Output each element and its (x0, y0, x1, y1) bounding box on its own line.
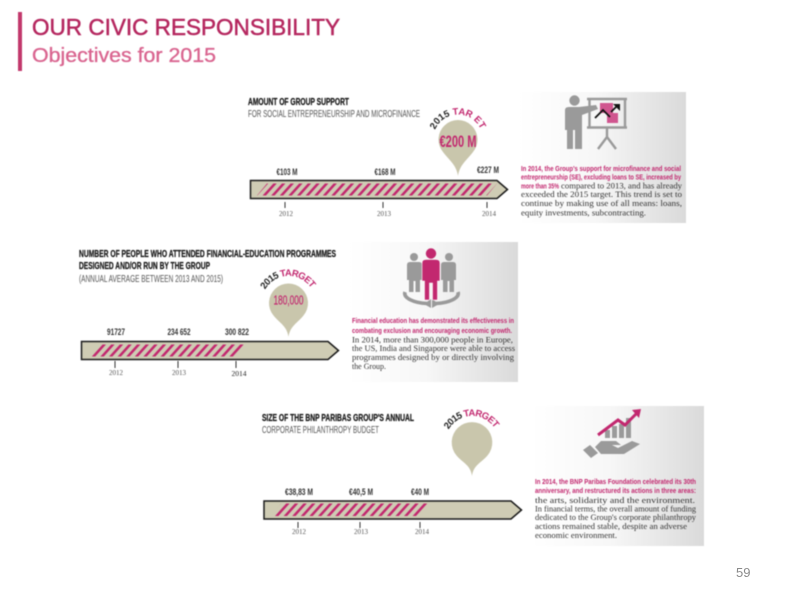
target pin (443, 408, 500, 476)
body text: dedicated to the Group's corporate philanthropy (535, 512, 697, 522)
target pin: 2015 TARGET (443, 408, 500, 430)
panel background (533, 406, 704, 546)
body text: In 2014, more than 300,000 people in Europe, (352, 334, 513, 344)
values: €40 M (411, 487, 429, 497)
year ticks (279, 202, 496, 218)
icon: hand with rising chart (583, 409, 641, 458)
values: €40,5 M (349, 487, 373, 497)
year ticks: 2013 (354, 528, 368, 536)
target pin (260, 268, 317, 336)
body text: more than 35% (521, 182, 559, 190)
year ticks: 2014 (415, 528, 430, 536)
year ticks: 2014 (232, 369, 247, 378)
timeline arrow (250, 180, 508, 198)
body text: the arts, solidarity and the environment. (535, 495, 695, 505)
heading: (ANNUAL AVERAGE BETWEEN 2013 AND 2015) (79, 273, 223, 285)
body text: In financial terms, the overall amount of funding (535, 504, 697, 514)
body text: equity investments, subcontracting. (521, 208, 646, 218)
body text: exceeded the 2015 target. This trend is set to (521, 189, 682, 199)
panel: group support (247, 92, 686, 224)
body text: the Group. (352, 361, 386, 371)
values (276, 165, 499, 177)
subtitle: Objectives for 2015 (32, 45, 216, 67)
heading: NUMBER OF PEOPLE WHO ATTENDED FINANCIAL-EDUCATION PROGRAMMES (79, 248, 336, 260)
header (18, 12, 340, 71)
target pin: 180,000 (274, 294, 304, 308)
values (285, 487, 429, 497)
page number: 59 (736, 565, 750, 580)
heading: DESIGNED AND/OR RUN BY THE GROUP (79, 260, 210, 272)
body text: In 2014, the BNP Paribas Foundation celebrated its 30th (535, 477, 696, 486)
body text: actions remained stable, despite an adverse (535, 521, 687, 531)
timeline arrow (264, 501, 522, 519)
year ticks: 2013 (172, 369, 186, 377)
body text (521, 164, 683, 218)
body text: entrepreneurship (SE), excluding loans to SE, increased by (521, 172, 682, 182)
body text: anniversary, and restructured its actions in three areas: (535, 486, 696, 495)
body text (352, 316, 516, 371)
year ticks (109, 361, 247, 378)
values: 234 652 (168, 327, 190, 337)
year ticks: 2014 (482, 210, 496, 218)
heading: CORPORATE PHILANTHROPY BUDGET (262, 424, 379, 436)
target pin: €200 M (440, 132, 476, 151)
values: 300 822 (225, 327, 249, 337)
body text: economic environment. (535, 530, 617, 540)
heading (79, 248, 336, 285)
year ticks (292, 522, 430, 536)
body text: In 2014, the Group's support for microfinance and social (521, 164, 681, 173)
heading (262, 412, 414, 436)
body text: combating exclusion and encouraging economic growth. (352, 326, 512, 335)
values: 91727 (107, 327, 125, 337)
body text: continue by making use of all means: loans, (521, 198, 682, 208)
target pin: 2015 TAR ET (429, 107, 487, 130)
values: €168 M (374, 167, 396, 177)
panel: philanthropy budget (262, 406, 704, 546)
timeline arrow (82, 342, 338, 360)
icon: group of people (405, 248, 458, 308)
heading: FOR SOCIAL ENTREPRENEURSHIP AND MICROFINANCE (248, 108, 420, 120)
values: €103 M (276, 167, 298, 177)
panel background (350, 242, 518, 382)
body text (535, 477, 697, 540)
year ticks: 2012 (292, 528, 306, 536)
panel background (520, 92, 686, 223)
target pin: 2015 TARGET (260, 268, 317, 290)
panel: financial education (78, 242, 518, 382)
body text: Financial education has demonstrated its effectiveness in (352, 316, 514, 325)
icon: presenter at board (565, 95, 627, 149)
body text: compared to 2013, and has already (561, 180, 683, 190)
heading (248, 96, 420, 120)
year ticks: 2013 (377, 210, 392, 218)
values: €38,83 M (285, 487, 313, 497)
year ticks: 2012 (279, 210, 294, 218)
body text: programmes designed by or directly involving (352, 352, 515, 362)
values: €227 M (477, 165, 499, 175)
header accent bar (18, 12, 22, 71)
year ticks: 2012 (109, 369, 124, 377)
title: OUR CIVIC RESPONSIBILITY (32, 14, 340, 40)
heading: AMOUNT OF GROUP SUPPORT (248, 96, 349, 108)
heading: SIZE OF THE BNP PARIBAS GROUP'S ANNUAL (262, 412, 414, 424)
values (107, 327, 249, 337)
target pin (429, 107, 487, 176)
body text: the US, India and Singapore were able to access (352, 343, 516, 353)
